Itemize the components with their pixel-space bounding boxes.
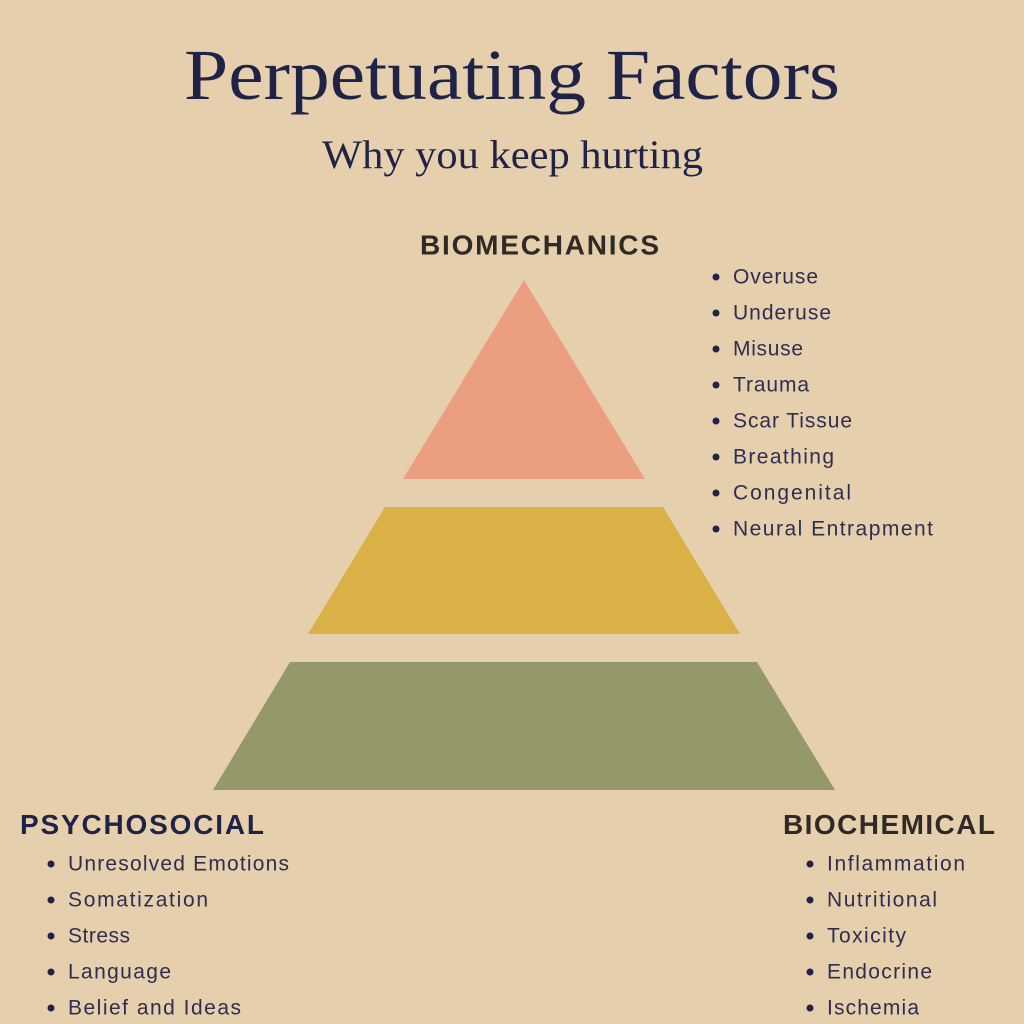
panel: biochemical list: Ischemia (827, 996, 919, 1020)
panel: psychosocial list: Belief and Ideas (68, 996, 241, 1020)
panel: biochemical list: Nutritional (827, 888, 937, 912)
panel: psychosocial list: Somatization (68, 888, 208, 912)
pyramid tier: bottom (213, 662, 835, 790)
panel: biochemical list: Inflammation (827, 852, 965, 876)
panel: biomechanics list: Congenital (733, 482, 851, 504)
panel: biomechanics list: Trauma (733, 374, 809, 396)
subtitle: Why you keep hurting (322, 132, 703, 177)
panel: psychosocial list: Language (68, 960, 171, 984)
pyramid tier: middle (308, 507, 740, 634)
panel: biochemical list: Endocrine (827, 960, 932, 984)
panel: biomechanics list (712, 266, 933, 540)
pyramid tier: top triangle (403, 280, 645, 479)
panel: biomechanics list: Breathing (733, 446, 834, 468)
panel: psychosocial list (48, 852, 289, 1020)
panel: biomechanics list: Neural Entrapment (733, 518, 933, 540)
panel: biochemical heading: BIOCHEMICAL (783, 809, 995, 840)
panel: biomechanics heading: BIOMECHANICS (420, 230, 659, 260)
title: Perpetuating Factors (184, 35, 840, 115)
panel: biomechanics list: Scar Tissue (733, 410, 852, 432)
panel: biomechanics list: Misuse (733, 338, 803, 360)
panel: biochemical list: Toxicity (827, 924, 906, 948)
panel: psychosocial list: Unresolved Emotions (68, 852, 289, 876)
panel: biochemical list (806, 852, 965, 1020)
pyramid (213, 280, 835, 790)
panel: psychosocial heading: PSYCHOSOCIAL (20, 809, 264, 840)
panel: psychosocial list: Stress (68, 924, 130, 948)
panel: biomechanics list: Overuse (733, 266, 818, 288)
panel: biomechanics list: Underuse (733, 302, 831, 324)
